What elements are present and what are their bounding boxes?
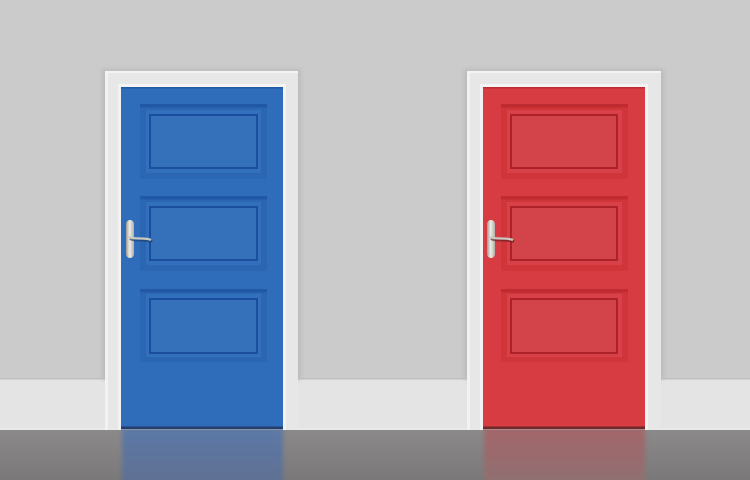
panel: top (501, 104, 628, 179)
door reflection: blue (122, 428, 283, 480)
red door assembly (464, 69, 664, 430)
door shadow at top and bottom (121, 87, 283, 430)
blue door assembly (102, 69, 301, 430)
icon: door handle (126, 220, 152, 258)
panel: middle (140, 196, 267, 271)
baseboard (0, 378, 750, 430)
door frame (464, 69, 664, 430)
panel: bottom (140, 289, 267, 362)
panel: top (140, 104, 267, 179)
door frame (102, 69, 301, 430)
floor (0, 430, 750, 480)
icon: door handle (487, 220, 514, 258)
door leaf (483, 87, 645, 428)
door reflection: red (484, 428, 645, 480)
door leaf (121, 87, 283, 428)
panel: middle (501, 196, 628, 271)
door shadow at top and bottom (483, 87, 645, 430)
panel: bottom (501, 289, 628, 362)
wall (0, 0, 750, 380)
